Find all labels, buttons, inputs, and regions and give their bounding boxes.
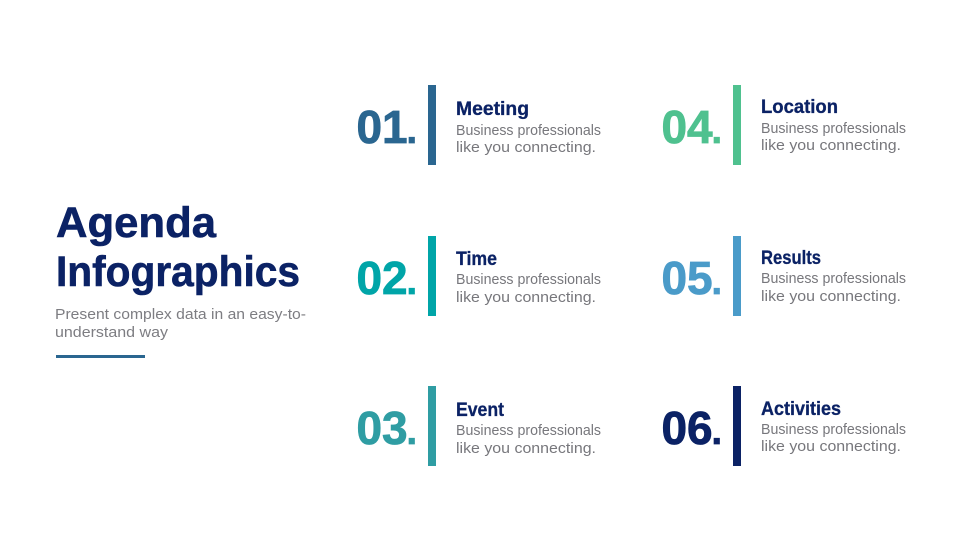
item 02: Time: Time <box>456 249 497 270</box>
item 03: Event: like you connecting. <box>456 440 596 457</box>
item 05: Results: 05 <box>662 252 713 304</box>
item 01: Meeting: Business professionals <box>456 122 601 139</box>
item 03: Event <box>356 386 601 466</box>
item 02: Time: like you connecting. <box>456 289 596 306</box>
item 01: Meeting: Meeting <box>456 99 529 120</box>
item 03: Event: . <box>406 411 417 453</box>
item 02: Time: Business professionals <box>456 271 601 288</box>
item 03: Event: 03 <box>356 402 408 454</box>
item 05: Results: . <box>712 261 722 303</box>
item 03: Event: Business professionals <box>456 422 601 439</box>
item 02: Time: . <box>406 261 417 303</box>
item 01: Meeting <box>356 85 601 165</box>
title: Infographics <box>56 248 300 296</box>
title: Agenda <box>56 199 217 247</box>
item 05: Results: Business professionals <box>761 270 906 287</box>
item 06: Activities: like you connecting. <box>761 438 901 455</box>
item 01: Meeting: 01 <box>356 101 408 153</box>
item 06: Activities: 06 <box>662 402 713 454</box>
item 04: Location: 04 <box>662 101 713 153</box>
item 01: Meeting: like you connecting. <box>456 139 596 156</box>
subtitle: Present complex data in an easy-to- <box>55 306 306 323</box>
item 06: Activities: Business professionals <box>761 421 906 438</box>
item 05: Results: Results <box>761 248 821 269</box>
item 04: Location <box>662 85 906 165</box>
subtitle: understand way <box>55 324 169 341</box>
item 06: Activities <box>662 386 906 466</box>
item 04: Location: Location <box>761 97 838 118</box>
item 03: Event: Event <box>456 400 505 421</box>
title underline <box>56 355 145 358</box>
item 04: Location: Business professionals <box>761 120 906 137</box>
item 02: Time: 02 <box>356 252 408 304</box>
item 02: Time <box>356 236 601 316</box>
item 04: Location: . <box>712 110 722 152</box>
item 05: Results <box>662 236 906 316</box>
item 01: Meeting: . <box>406 110 417 152</box>
item 04: Location: like you connecting. <box>761 137 901 154</box>
item 05: Results: like you connecting. <box>761 288 901 305</box>
title <box>56 199 300 296</box>
item 06: Activities: . <box>712 411 722 453</box>
item 06: Activities: Activities <box>761 399 841 420</box>
subtitle <box>55 306 306 341</box>
